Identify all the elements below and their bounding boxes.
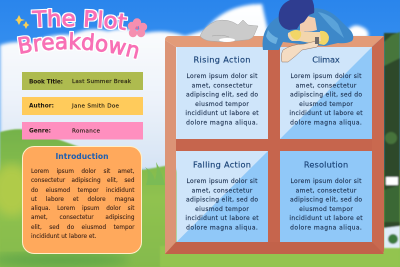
text block: falling action: adipiscing elit, sed do: [186, 197, 258, 204]
title: The Plot Breakdown: Breakdown: [16, 30, 139, 60]
text block: introduction: Lorem ipsum dolor sit amet,: [31, 169, 134, 175]
text block: climax: adipiscing elit, sed do: [290, 92, 362, 99]
text block: resolution: amet, consectetur: [296, 187, 357, 194]
text block: rising action: [185, 73, 259, 126]
text block: rising action: Lorem ipsum dolor sit: [186, 73, 258, 80]
hand: [281, 41, 318, 62]
arm: [288, 30, 321, 43]
info bar: book title: Book Title:: [29, 80, 63, 86]
text block: climax: [289, 73, 363, 126]
info bar: genre: Genre:: [29, 128, 51, 134]
tall grass: [145, 162, 165, 185]
heading: resolution: Resolution: [304, 160, 348, 170]
text block: rising action: amet, consectetur: [192, 82, 253, 89]
text block: introduction: amet, consectetur adipiscing: [31, 215, 134, 221]
text block: falling action: Lorem ipsum dolor sit: [186, 178, 258, 185]
text block: falling action: incididunt ut labore et: [185, 215, 259, 222]
sleeve cuff: [319, 31, 329, 45]
text block: resolution: [289, 178, 363, 231]
text block: rising action: incididunt ut labore et: [185, 110, 259, 117]
text block: resolution: adipiscing elit, sed do: [290, 197, 362, 204]
text block: climax: Lorem ipsum dolor sit: [290, 73, 362, 80]
panel: introduction: [22, 146, 142, 254]
heading: introduction: Introduction: [55, 152, 109, 161]
text block: climax: eiusmod tempor: [299, 101, 353, 108]
jacket: [263, 8, 353, 50]
text block: resolution: incididunt ut labore et: [289, 215, 363, 222]
text block: introduction: [31, 168, 135, 240]
tree foliage: [384, 32, 400, 248]
text block: introduction: aliqua. Lorem ipsum dolor sit: [31, 206, 134, 212]
text block: resolution: eiusmod tempor: [299, 206, 353, 213]
text block: introduction: incididunt ut labore et.: [31, 234, 97, 240]
text block: falling action: [185, 178, 259, 231]
text block: rising action: dolore magna aliqua.: [186, 119, 258, 126]
face: [300, 14, 317, 32]
text block: climax: dolore magna aliqua.: [290, 119, 362, 126]
info bar: author: Author:: [29, 104, 54, 110]
info bar: book title: Last Summer Break: [72, 79, 132, 85]
text block: rising action: eiusmod tempor: [195, 101, 249, 108]
text block: introduction: consectetur adipiscing elit, sed: [31, 178, 134, 184]
text block: falling action: eiusmod tempor: [195, 206, 249, 213]
info bar: author: Jane Smith Doe: [71, 104, 120, 110]
text block: resolution: dolore magna aliqua.: [290, 224, 362, 231]
hair: [279, 0, 314, 30]
heading: climax: Climax: [312, 54, 340, 64]
heading: rising action: Rising Action: [194, 54, 250, 64]
text block: resolution: Lorem ipsum dolor sit: [290, 178, 362, 185]
text block: falling action: dolore magna aliqua.: [186, 224, 258, 231]
text block: rising action: adipiscing elit, sed do: [186, 92, 258, 99]
text block: climax: amet, consectetur: [296, 82, 357, 89]
text block: introduction: elit, sed do eiusmod tempor: [31, 225, 134, 231]
title: The Plot Breakdown: The Plot: [30, 8, 128, 32]
text block: climax: incididunt ut labore et: [289, 110, 363, 117]
heading: falling action: Falling Action: [193, 160, 251, 170]
text block: falling action: amet, consectetur: [192, 187, 253, 194]
text block: introduction: do eiusmod tempor incididunt: [31, 188, 134, 194]
info bar: genre: Romance: [72, 128, 101, 134]
text block: introduction: ut labore et dolore magna: [31, 197, 134, 203]
